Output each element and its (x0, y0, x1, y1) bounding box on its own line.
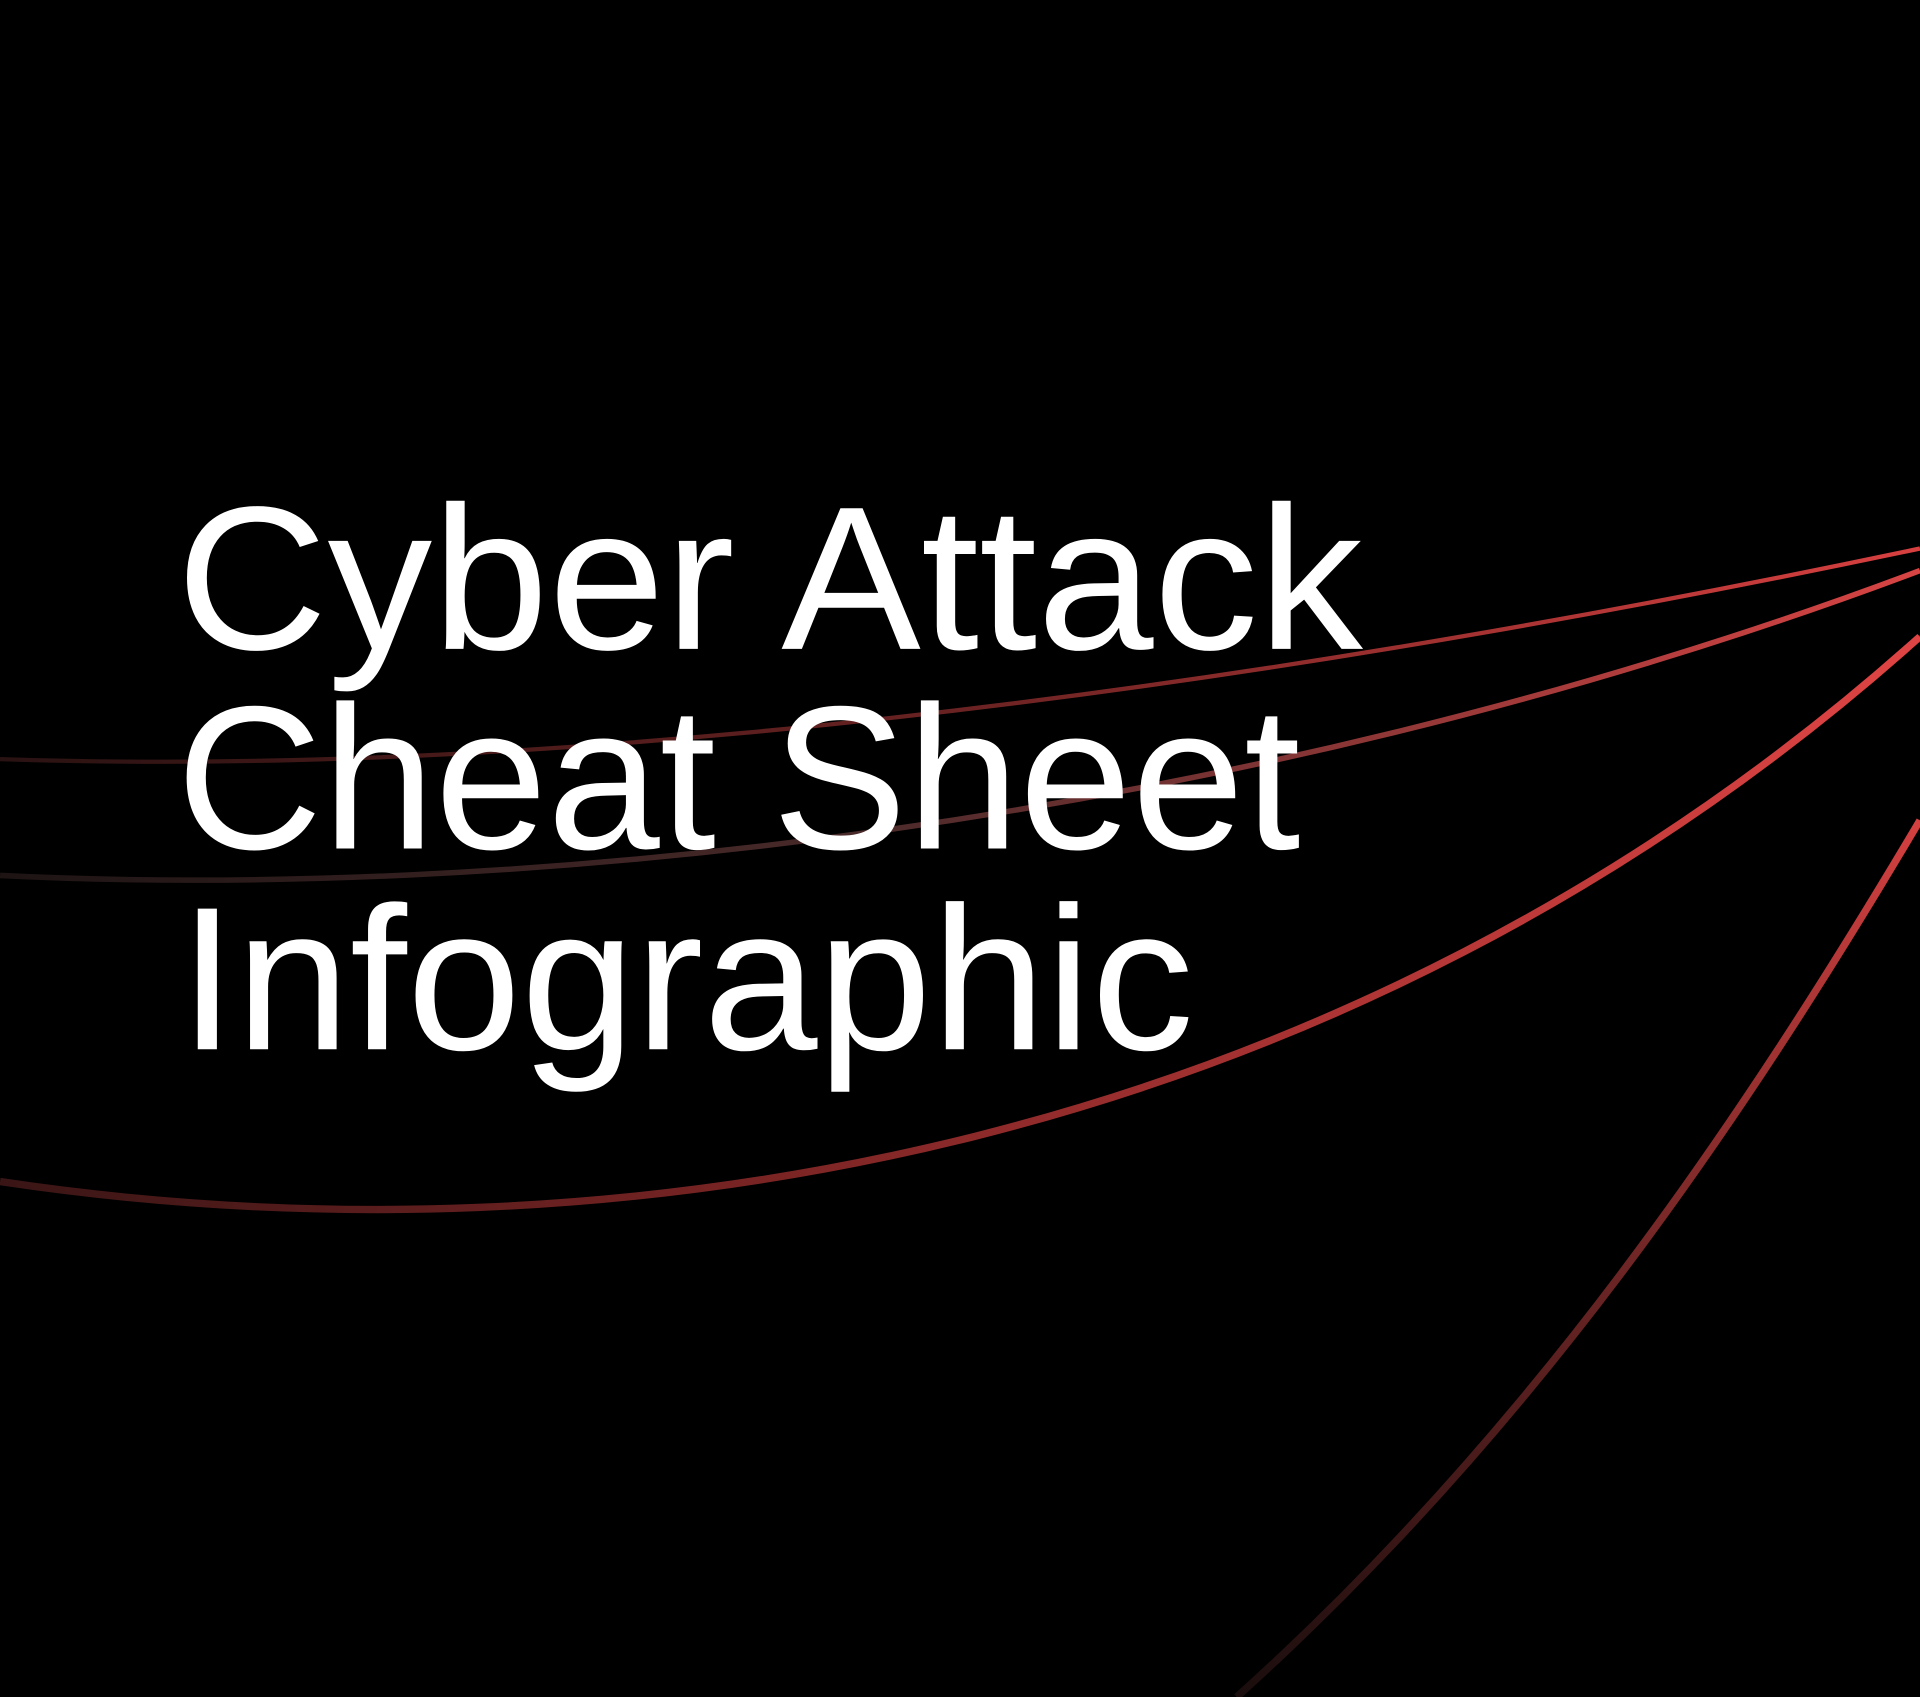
decorative red curves (0, 549, 1920, 1697)
title: Cyber Attack (176, 465, 1364, 693)
title (176, 465, 1364, 1093)
title: Infographic (179, 865, 1194, 1093)
title: Cheat Sheet (176, 665, 1300, 893)
